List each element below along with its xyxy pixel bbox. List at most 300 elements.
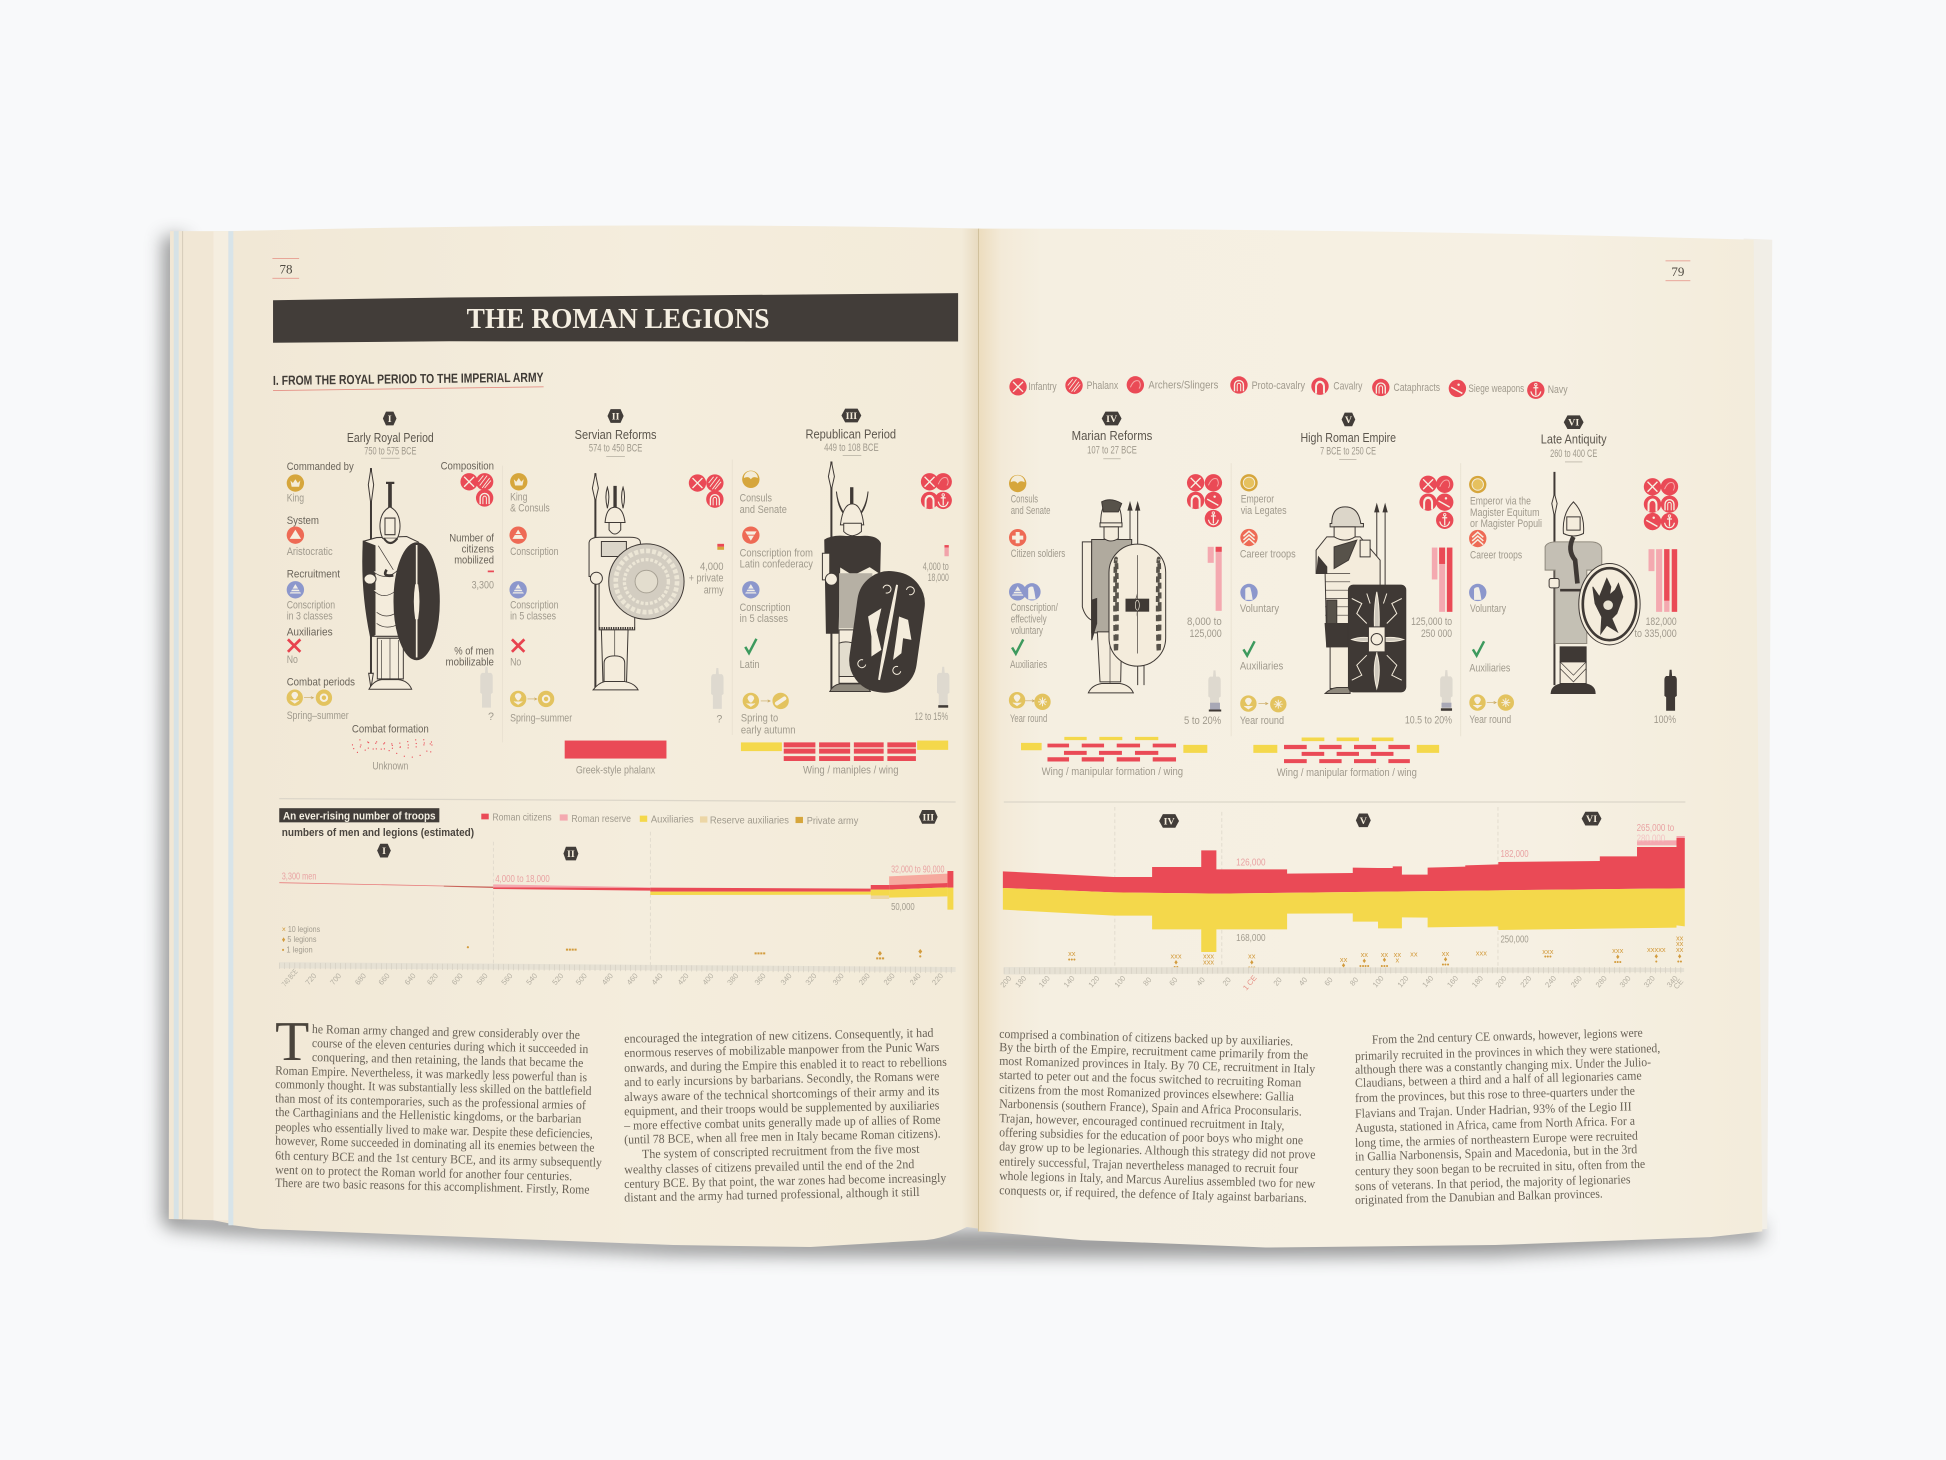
body text column 1: he Roman army changed and grew considerably over the	[312, 1022, 580, 1042]
chart values right: 168,000	[1236, 933, 1266, 944]
legion key	[282, 925, 320, 955]
body text column 4: Claudians, between a third and a half of all legionaries came	[1355, 1069, 1642, 1090]
heading V: 7 BCE to 250 CE	[1320, 445, 1376, 457]
legion markers right: ♦	[1444, 954, 1448, 963]
divider IV V	[1230, 463, 1232, 736]
legion markers right: xxx	[1203, 951, 1214, 960]
body text column 4: long time, the armies of northeastern Europe were recruited	[1355, 1129, 1639, 1150]
chart legend: Reserve auxiliaries	[710, 816, 789, 827]
time axis left: 720	[303, 971, 318, 987]
section heading	[273, 370, 544, 391]
heading I	[347, 430, 434, 458]
left attributes III: Conscription	[740, 602, 791, 614]
time axis left: 520	[550, 971, 565, 987]
time axis left: 280	[857, 971, 872, 987]
time axis right: 220	[1518, 974, 1533, 989]
time axis right: 1 CE	[1241, 973, 1259, 992]
mobilizable I: ?	[488, 711, 494, 723]
legion markers right	[1068, 933, 1684, 972]
legion markers right: •••	[1614, 958, 1622, 967]
legend: troop types: Navy	[1548, 384, 1568, 396]
legion markers right: xx	[1410, 949, 1418, 958]
numbers V: 125,000 to	[1411, 616, 1452, 628]
time axis left: 640	[403, 971, 418, 987]
legion markers right: xxxxx	[1647, 945, 1666, 954]
numbers II: + private	[689, 573, 724, 585]
time axis right: 120	[1395, 974, 1410, 989]
time axis left: 320	[803, 971, 818, 987]
time axis right: 280	[1594, 974, 1609, 989]
left attributes VI	[1469, 476, 1542, 726]
chart legend: Auxiliaries	[651, 815, 694, 826]
body text column 1: commonly thought. It was substantially less skilled on the battlefield	[275, 1077, 592, 1098]
numbers IV: 5 to 20%	[1184, 715, 1222, 727]
numbers II: army	[704, 584, 724, 596]
chart values right: 265,000 to	[1637, 823, 1674, 834]
body text column 3: started to peter out and the focus switched to recruiting Roman	[999, 1068, 1302, 1090]
chart values right: 126,000	[1236, 857, 1266, 868]
time axis right: 320	[1642, 974, 1657, 989]
legion markers right: •••	[1442, 960, 1450, 969]
left attributes VI: Year round	[1469, 714, 1511, 726]
chart legend: Roman citizens	[492, 812, 552, 823]
left attributes II: King	[510, 491, 528, 503]
legend: troop types: Proto-cavalry	[1252, 380, 1306, 392]
legend: troop types: Siege weapons	[1468, 383, 1524, 395]
numbers II: ?	[716, 714, 722, 726]
left attributes I: System	[287, 515, 319, 527]
chart legend: Private army	[807, 816, 859, 827]
left attributes III: Latin confederacy	[740, 558, 813, 570]
left attributes II: Conscription	[510, 599, 559, 611]
left attributes VI: Emperor via the	[1470, 495, 1531, 507]
left attributes V: Career troops	[1240, 548, 1296, 560]
numbers IV: 8,000 to	[1187, 616, 1222, 628]
time axis right: 120	[1086, 974, 1101, 989]
chart values left: 50,000	[891, 902, 915, 913]
composition I	[441, 460, 494, 507]
body text column 4: century they soon began to be recruited in situ, often from the	[1355, 1157, 1646, 1178]
time axis right: 240	[1543, 974, 1558, 989]
body text column 1	[275, 1011, 603, 1197]
body text column 4: Flavians and Trajan. Under Hadrian, 93% of the Legio III	[1355, 1099, 1632, 1121]
left attributes I: King	[287, 493, 304, 505]
time axis right: 180	[1013, 974, 1028, 989]
time axis right: 80	[1141, 975, 1153, 988]
divider I II	[502, 466, 504, 742]
body text column 1: Roman Empire. Nevertheless, it was markedly less powerful than is	[275, 1063, 587, 1084]
citizens mobilized I: Number of	[449, 532, 494, 544]
panel: period VI late antiquity	[1469, 415, 1678, 726]
body text column 4: from the provinces, but this rose to three-quarters under the	[1355, 1084, 1635, 1105]
left attributes VI: Magister Equitum	[1470, 507, 1540, 519]
time axis left: 680	[353, 971, 368, 987]
chart badges: I	[382, 846, 386, 857]
body text column 2: and to early incursions by barbarians. Secondly, the Romans were	[624, 1069, 940, 1089]
body text column 4: primarily recruited in the provinces in which they were stationed,	[1355, 1041, 1660, 1063]
formation II	[565, 741, 666, 776]
body text column 2: wealthy classes of citizens prevailed until the end of the 2nd	[624, 1157, 915, 1177]
numbers III: 18,000	[928, 572, 949, 584]
soldier V	[1316, 505, 1406, 694]
numbers III: 4,000 to	[923, 561, 949, 573]
legion key: ♦ 5 legions	[282, 935, 316, 944]
badge VI: VI	[1568, 418, 1579, 429]
formation II: Greek-style phalanx	[576, 764, 656, 776]
time axis right: 260	[1569, 974, 1584, 989]
time axis right: 160	[1037, 974, 1052, 989]
body text column 2: century BCE. By that point, the war zones had become increasingly	[624, 1171, 947, 1191]
badge III	[841, 409, 861, 422]
right page	[978, 229, 1762, 1248]
chart values right: 280,000	[1637, 834, 1665, 845]
legion markers right: •••	[1248, 963, 1256, 972]
time axis left: 660	[377, 971, 392, 987]
numbers V: 250 000	[1421, 628, 1452, 640]
formation IV	[1021, 737, 1207, 778]
chart badges: II	[567, 849, 575, 860]
time axis right: 200	[998, 974, 1013, 989]
panel: period IV marian	[1009, 412, 1222, 778]
numbers VI	[1634, 549, 1677, 726]
chart title: numbers of men and legions (estimated)	[282, 827, 474, 839]
body text column 3: Trajan, however, encouraged continued recruitment in Italy,	[999, 1111, 1285, 1133]
left attributes VI: Career troops	[1470, 549, 1522, 561]
chart badges: III	[923, 812, 934, 823]
legend: troop types: Archers/Slingers	[1148, 379, 1218, 391]
composition III	[921, 473, 952, 509]
legion markers right: ♦	[1342, 961, 1346, 970]
left attributes V: Auxiliaries	[1240, 661, 1283, 673]
time axis right: 60	[1167, 975, 1180, 988]
badge V	[1342, 413, 1355, 426]
heading III	[805, 426, 896, 456]
badge IV: IV	[1106, 414, 1118, 425]
body text column 1: There are two basic reasons for this accomplishment. Firstly, Rome	[275, 1176, 590, 1197]
legend: troop types: Cavalry	[1333, 380, 1363, 392]
time axis left: 500	[574, 971, 589, 987]
chart badges: VI	[1586, 814, 1597, 825]
page number 78: 78	[280, 261, 293, 276]
composition II	[689, 474, 706, 492]
soldier IV	[1082, 500, 1166, 693]
body text column 4: Augusta, stationed in Africa, came from North Africa. For a	[1355, 1114, 1635, 1135]
book	[169, 225, 1772, 1248]
left attributes IV: Citizen soldiers	[1011, 548, 1065, 560]
heading III: Republican Period	[805, 426, 896, 441]
time axis left: 420	[676, 971, 691, 987]
body text column 3: most Romanized provinces in Italy. By 70 CE, recruitment in Italy	[999, 1054, 1316, 1076]
legion markers right: xx	[1676, 933, 1684, 942]
time axis left: 220	[930, 971, 945, 987]
body text column 2: always aware of the technical shortcomings of their army and its	[624, 1084, 940, 1104]
citizens mobilized I: 3,300	[472, 580, 494, 592]
left attributes I: Spring–summer	[287, 710, 349, 722]
title banner: THE ROMAN LEGIONS	[467, 304, 769, 335]
time axis left: 580	[475, 971, 490, 987]
time axis right: 140	[1062, 974, 1077, 989]
legion markers right: xxx	[1542, 947, 1554, 956]
time axis left: 700	[328, 971, 343, 987]
left attributes V: Voluntary	[1240, 603, 1280, 615]
chart values left	[282, 865, 945, 913]
left attributes IV: Year round	[1010, 713, 1047, 725]
body text column 3: comprised a combination of citizens backed up by auxiliaries.	[999, 1027, 1293, 1048]
body text column 1: course of the eleven centuries during which it succeeded in	[312, 1036, 589, 1056]
time axis right: 60	[1322, 975, 1335, 988]
area chart right	[1003, 836, 1685, 952]
body text column 2: encouraged the integration of new citizens. Consequently, it had	[624, 1026, 934, 1046]
left attributes II: Spring–summer	[510, 712, 573, 724]
chart legend	[481, 812, 859, 827]
left attributes III: early autumn	[741, 725, 796, 737]
body text column 3	[999, 1027, 1316, 1205]
chart badges: IV	[1164, 816, 1175, 827]
left attributes I: Commanded by	[287, 461, 354, 473]
mobilizable I: mobilizable	[446, 656, 494, 668]
time axis left: 740 BCE	[280, 967, 300, 988]
left attributes III	[740, 471, 813, 737]
numbers II: 4,000	[700, 561, 724, 573]
badge II	[608, 409, 624, 423]
chart rule left	[279, 799, 956, 802]
body text column 1: the Carthaginians and the Hellenistic kingdoms, or the barbarian	[275, 1105, 582, 1126]
chart values right	[1236, 823, 1674, 946]
soldier II	[589, 473, 684, 690]
legend: troop types: Phalanx	[1087, 380, 1119, 392]
left attributes II: & Consuls	[510, 503, 550, 515]
heading VI: Late Antiquity	[1541, 431, 1607, 446]
body text column 1: however, Rome succeeded in dominating all its enemies between the	[275, 1134, 595, 1155]
left attributes I: Conscription	[287, 599, 335, 611]
time axis left: 480	[600, 971, 615, 987]
section heading: I. FROM THE ROYAL PERIOD TO THE IMPERIAL ARMY	[273, 370, 544, 388]
legion markers right: ♦	[1678, 951, 1682, 960]
time axis left: 540	[524, 971, 539, 987]
legion markers right: xx	[1381, 950, 1388, 959]
legion markers right: •••	[1381, 961, 1389, 970]
formation I	[352, 723, 433, 773]
legion markers left	[467, 946, 922, 958]
legion markers right: xx	[1676, 939, 1684, 948]
title banner	[273, 293, 958, 343]
body text column 1: 6th century BCE and the 1st century BCE, and its army subsequently	[275, 1148, 603, 1170]
heading V: High Roman Empire	[1301, 430, 1396, 445]
mobilizable I	[446, 645, 494, 723]
body text column 2: – more effective combat units generally made up of allies of Rome	[623, 1113, 941, 1133]
heading III: 449 to 108 BCE	[824, 442, 879, 454]
time axis left: 300	[831, 971, 846, 987]
chart badges: V	[1360, 816, 1368, 827]
numbers V: 10.5 to 20%	[1405, 715, 1452, 727]
heading I: Early Royal Period	[347, 430, 434, 445]
body text column 3: whole legions in Italy, and Marcus Aurelius assembled two for new	[999, 1169, 1316, 1191]
left attributes I: Combat periods	[287, 676, 355, 688]
left attributes I: Recruitment	[287, 568, 340, 580]
legion markers right: •	[1655, 957, 1658, 966]
badge III: III	[846, 411, 857, 422]
time axis left: 440	[650, 971, 665, 987]
numbers VI: to 335,000	[1634, 628, 1677, 640]
body text column 3: By the birth of the Empire, recruitment came primarily from the	[999, 1040, 1309, 1062]
soldier VI	[1545, 472, 1640, 694]
page number 79: 79	[1671, 264, 1684, 279]
legion markers right: xx	[1442, 949, 1449, 958]
chart badges	[377, 810, 1601, 860]
legion markers right: ••	[1173, 963, 1179, 972]
soldier I	[363, 468, 439, 689]
time axis right: CE	[1672, 977, 1685, 991]
heading II: 574 to 450 BCE	[589, 442, 642, 454]
badge VI	[1564, 415, 1584, 429]
left attributes IV: Consuls	[1011, 494, 1038, 506]
heading IV	[1072, 428, 1152, 459]
legion markers right: xx	[1068, 949, 1076, 958]
body text column 3: entirely successful, Trajan nevertheless managed to recruit four	[999, 1154, 1299, 1176]
numbers IV: 125,000	[1189, 628, 1222, 640]
chart legend: Roman reserve	[571, 814, 631, 825]
formation III	[741, 741, 948, 776]
citizens mobilized I	[449, 532, 494, 592]
left attributes V: Emperor	[1241, 494, 1275, 506]
time axis right: 300	[1618, 974, 1633, 989]
body text column 2	[623, 1026, 947, 1205]
legend: troop types: Infantry	[1028, 381, 1057, 393]
composition V	[1419, 476, 1453, 529]
left attributes IV	[1009, 475, 1065, 725]
mobilizable I: % of men	[454, 645, 494, 657]
left attributes I: Aristocratic	[287, 546, 333, 558]
time axis right: 140	[1420, 974, 1435, 989]
left attributes III: Consuls	[740, 493, 772, 505]
left attributes III: Spring to	[741, 712, 778, 724]
body text column 1: conquering, and then retaining, the lands that became the	[312, 1050, 584, 1070]
body text column 1: peoples who essentially lived to make war. Despite these deficiencies,	[275, 1120, 593, 1141]
body text column 2: The system of conscripted recruitment from the five most	[642, 1142, 920, 1161]
time axis right: 100	[1371, 974, 1386, 989]
panel: period V high empire	[1240, 413, 1453, 779]
time axis left: 560	[499, 971, 514, 987]
legion markers right: ♦	[1616, 952, 1620, 961]
left attributes IV: voluntary	[1011, 625, 1043, 637]
time axis right: 200	[1494, 974, 1509, 989]
citizens mobilized I: citizens	[462, 544, 494, 556]
body text column 4: sons of veterans. In that period, the majority of legionaries	[1355, 1172, 1631, 1193]
legion markers right: ♦	[1174, 958, 1178, 967]
legion key: × 10 legions	[282, 925, 320, 934]
drop cap: T	[275, 1011, 309, 1073]
legion markers right: ♦	[1250, 958, 1254, 967]
legion markers right: •••	[1068, 955, 1076, 964]
left attributes II	[509, 473, 573, 724]
left attributes III: and Senate	[740, 504, 787, 516]
body text column 3: offering subsidies for the education of poor boys who might one	[999, 1125, 1304, 1147]
page number 78	[272, 258, 299, 278]
heading V	[1301, 430, 1396, 459]
time axis right: 180	[1470, 974, 1485, 989]
area chart left	[279, 871, 953, 910]
numbers III: 12 to 15%	[915, 711, 949, 723]
body text column 3: day grow up to be legionaries. Although this strategy did not prove	[999, 1139, 1316, 1162]
time axis left: 600	[450, 971, 465, 987]
formation V: Wing / manipular formation / wing	[1277, 767, 1417, 779]
right page edge	[1744, 239, 1772, 1231]
time axis left: 260	[882, 971, 897, 987]
left attributes I: No	[287, 654, 298, 666]
body text column 4: although there was a constantly changing mix. Under the Julio-	[1355, 1055, 1651, 1077]
chart title	[279, 808, 474, 839]
body text column 3: conquests or, if required, the defence of Italy against barbarians.	[999, 1183, 1307, 1205]
left attributes II: Conscription	[510, 546, 559, 558]
numbers V	[1405, 548, 1453, 727]
time axis right: 40	[1297, 975, 1309, 988]
left attributes V: via Legates	[1241, 505, 1287, 517]
left attributes III: in 5 classes	[740, 613, 788, 625]
time axis right: 100	[1113, 974, 1128, 989]
formation IV: Wing / manipular formation / wing	[1042, 766, 1183, 778]
left attributes IV: effectively	[1011, 614, 1047, 626]
legion markers right: ♦	[1362, 956, 1366, 965]
body text column 4: originated from the Danubian and Balkan provinces.	[1355, 1187, 1603, 1207]
time axis right: 40	[1195, 975, 1207, 988]
chart values right: 182,000	[1500, 849, 1529, 860]
time axis right: 340	[1665, 974, 1680, 989]
left attributes VI: Auxiliaries	[1469, 663, 1510, 675]
body text column 2: (until 78 BCE, when all free men in Italy became Roman citizens).	[624, 1127, 941, 1147]
left attributes VI: Voluntary	[1470, 603, 1507, 615]
numbers VI: 100%	[1654, 714, 1676, 726]
heading II: Servian Reforms	[575, 427, 657, 442]
composition VI	[1644, 478, 1678, 530]
formation I: Unknown	[372, 761, 408, 773]
badge I	[383, 412, 397, 425]
left attributes IV: Conscription/	[1011, 602, 1058, 614]
panel: period III republican	[740, 409, 952, 776]
legion markers right: ••••	[1359, 961, 1370, 970]
time axis right: 80	[1348, 975, 1360, 988]
time axis right: 20	[1271, 975, 1284, 988]
formation I: Combat formation	[352, 723, 429, 735]
time axis left: 340	[779, 971, 794, 987]
body text column 1: than most of its contemporaries, such as the professional armies of	[275, 1091, 587, 1112]
divider V VI	[1460, 463, 1462, 736]
body text column 3: citizens from the most Romanized provinces elsewhere: Gallia	[999, 1082, 1294, 1104]
numbers IV	[1184, 547, 1222, 727]
heading II	[575, 427, 657, 456]
book shadow	[161, 236, 1762, 1257]
composition II second	[706, 474, 724, 508]
legion markers right: xx	[1394, 950, 1401, 959]
time axis left	[279, 962, 956, 988]
legion markers right: xxx	[1203, 958, 1214, 967]
left attributes I	[287, 461, 355, 722]
legion markers right: xx	[1248, 951, 1256, 960]
legion markers right: xx	[1340, 955, 1348, 964]
composition IV	[1187, 474, 1222, 527]
body text column 4: From the 2nd century CE onwards, however, legions were	[1372, 1026, 1643, 1047]
chart values left: 32,000 to 90,000	[891, 865, 945, 876]
legend: troop types: Cataphracts	[1393, 382, 1440, 394]
divider II III	[731, 459, 733, 735]
chart values left: 4,000 to 18,000	[495, 874, 550, 885]
composition I: Composition	[441, 460, 494, 472]
numbers III	[915, 545, 949, 723]
body text column 2: equipment, and their troops would be supplemented by auxiliaries	[624, 1098, 940, 1118]
body text column 2: distant and the army had turned professional, although it still	[624, 1185, 920, 1205]
left attributes V: Year round	[1240, 715, 1284, 727]
left attributes II: No	[510, 656, 521, 668]
left attributes VI: or Magister Populi	[1470, 518, 1542, 530]
